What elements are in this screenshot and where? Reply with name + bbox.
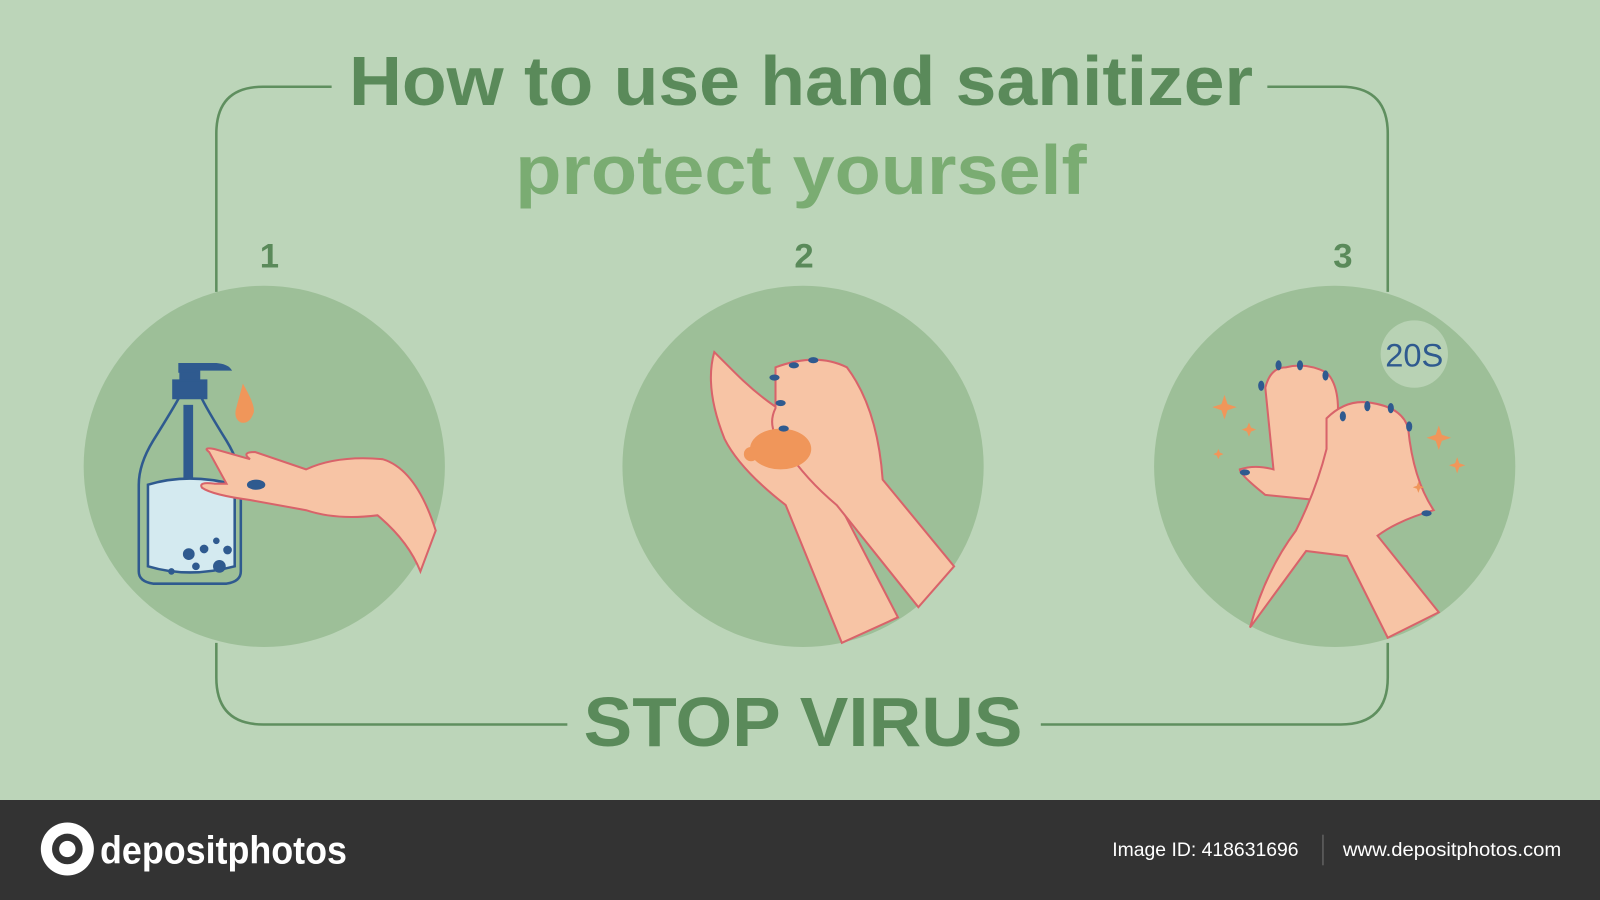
badge: 20S (1381, 320, 1448, 388)
subtitle: protect yourself (515, 131, 1088, 209)
step numbers: 3 (1333, 237, 1353, 275)
image id: Image ID: 418631696 (1112, 839, 1299, 861)
panel: step 1 (84, 286, 445, 647)
icon: rubbing hands (711, 352, 898, 643)
title: How to use hand sanitizer (349, 42, 1253, 120)
step numbers (260, 237, 1353, 275)
logo: depositphotos (100, 829, 347, 872)
footer heading: STOP VIRUS: STOP VIRUS (584, 683, 1022, 761)
logo (41, 822, 347, 876)
step numbers: 2 (794, 237, 814, 275)
badge: 20S: 20S (1385, 336, 1443, 373)
step numbers: 1 (260, 237, 279, 275)
icon: clean hands (1240, 366, 1338, 500)
frame (216, 87, 1388, 724)
icon: drop (235, 384, 254, 423)
bottom bar (0, 800, 1600, 900)
icon: pump bottle (139, 364, 241, 584)
image id (1112, 835, 1561, 865)
panel: step 3 (1154, 286, 1515, 647)
panel: step 2 (622, 286, 984, 647)
icon: hand (201, 448, 436, 571)
image id: www.depositphotos.com (1342, 839, 1561, 861)
